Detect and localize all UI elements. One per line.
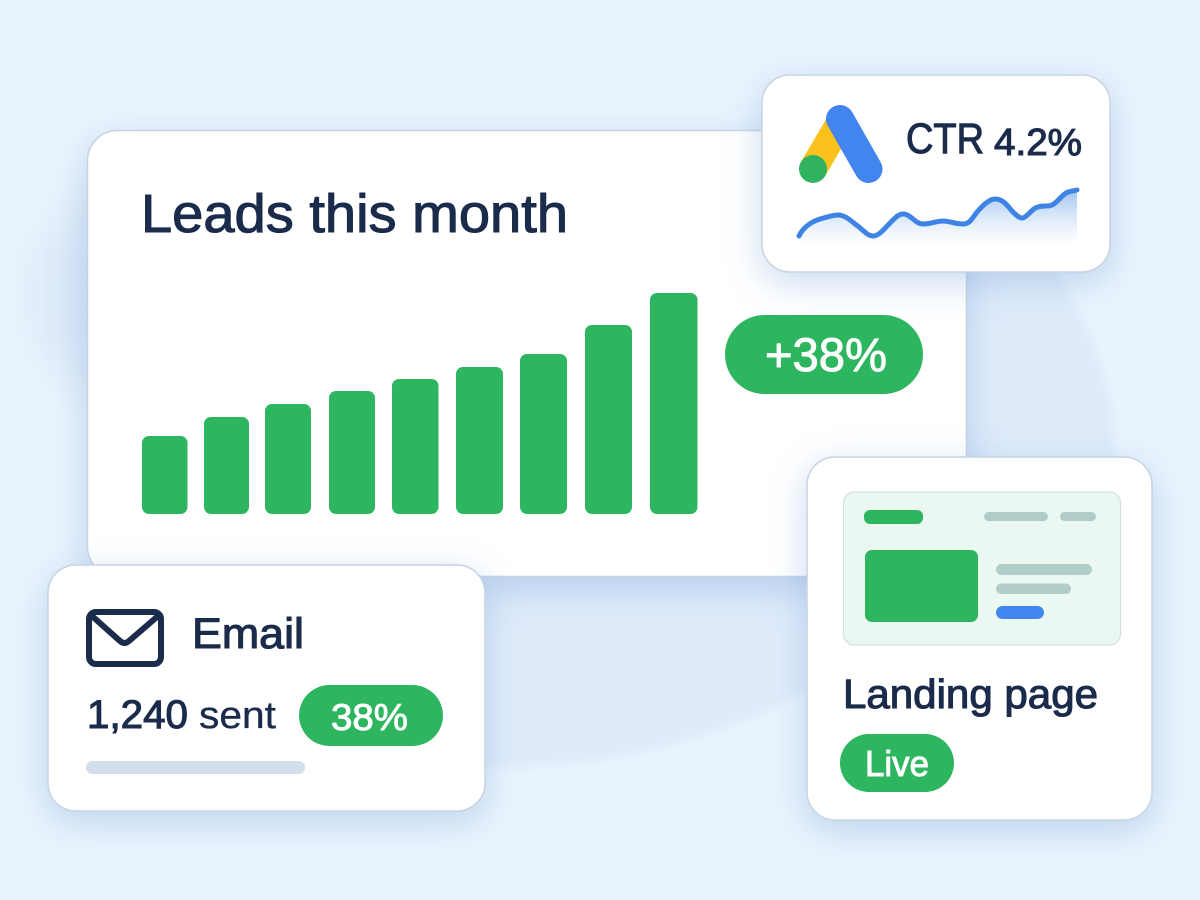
panel: email xyxy=(48,565,485,811)
icon: envelope xyxy=(89,612,161,664)
text: sent count: 1,240 xyxy=(87,693,188,737)
background blob: right xyxy=(300,200,1114,767)
badge: +38%: +38% xyxy=(765,328,887,381)
text: sent: sent xyxy=(199,695,276,737)
badge: 38%: 38% xyxy=(331,697,408,738)
badge: live: Live xyxy=(865,743,929,784)
panel: CTR xyxy=(762,75,1110,272)
text: 4.2%: 4.2% xyxy=(994,122,1082,164)
sparkline xyxy=(799,190,1077,242)
heading: leads this month: Leads this month xyxy=(141,184,568,244)
heading: landing page: Landing page xyxy=(843,671,1098,717)
heading: email: Email xyxy=(192,610,304,658)
badge: 38% xyxy=(299,685,443,746)
badge: live xyxy=(840,734,954,792)
page mockup xyxy=(844,492,1120,645)
bar chart xyxy=(142,293,698,514)
panel: leads this month xyxy=(88,130,966,576)
panel: landing page xyxy=(807,457,1152,820)
background blob: left xyxy=(32,195,208,395)
badge: +38% xyxy=(725,315,923,394)
text: CTR: CTR xyxy=(906,115,984,163)
progress bar xyxy=(86,761,305,774)
icon: ads logo xyxy=(799,118,868,183)
